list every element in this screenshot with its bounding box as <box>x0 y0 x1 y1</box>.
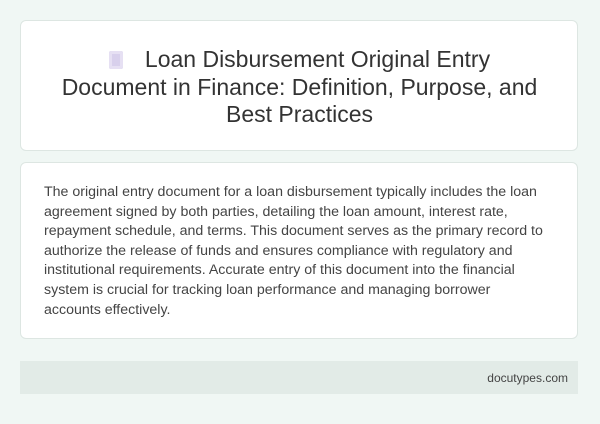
icon: document <box>109 51 123 69</box>
text block: institutional requirements. Accurate entry of this document into the financial <box>44 262 515 278</box>
text block: authorize the release of funds and ensures compliance with regulatory and <box>44 243 512 259</box>
panel: description <box>20 162 578 339</box>
footer <box>20 361 578 394</box>
footer: docutypes.com <box>487 371 568 385</box>
title: Loan Disbursement Original Entry Document in Finance: Definition, Purpose, and Best Practices <box>62 46 537 127</box>
text block: The original entry document for a loan disbursement typically includes the loan <box>44 184 537 200</box>
text block: accounts effectively. <box>44 302 170 318</box>
text block: system is crucial for tracking loan performance and managing borrower <box>44 282 490 298</box>
text block <box>44 184 543 318</box>
panel: title <box>20 20 578 151</box>
text block: agreement signed by both parties, detailing the loan amount, interest rate, <box>44 204 508 220</box>
text block: repayment schedule, and terms. This document serves as the primary record to <box>44 223 543 239</box>
